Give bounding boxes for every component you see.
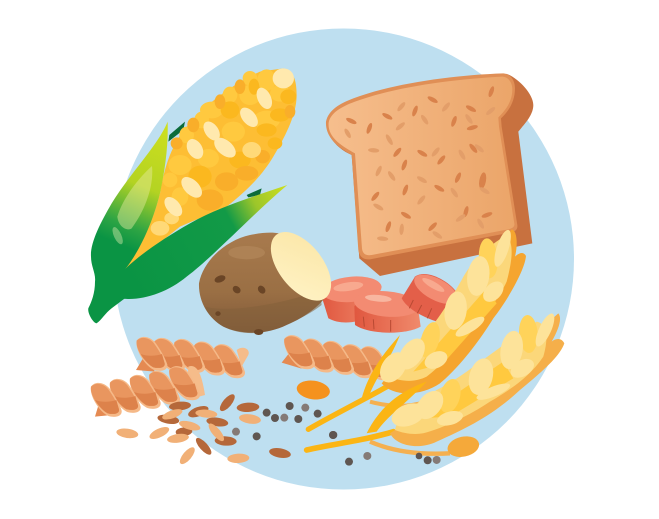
icon: corn [88,68,297,323]
dark husk behind [168,122,262,197]
cob [122,68,297,273]
right husk [120,185,287,299]
left husk [88,122,168,323]
icon: grains [116,392,292,466]
icon: pasta spiral center [282,335,392,380]
slice left [321,274,383,323]
slice right [402,269,462,323]
icon: peppercorns and orange seed [232,378,337,440]
icon: sausage slices [321,269,462,333]
potato eyes [214,274,267,335]
background circle [113,28,574,490]
icon: peppercorns lower right [329,431,441,466]
icon: pasta spiral lower left [91,366,205,417]
kernels [151,68,296,236]
icon: bread slice [326,73,533,276]
icon: pasta spiral upper left [136,337,249,378]
slice middle [353,289,421,333]
icon: wheat ear upper [308,228,526,429]
icon: potato [199,221,343,335]
bread seeds [345,86,495,233]
kernel highlights [161,68,294,220]
icon: wheat ear lower [307,311,564,460]
husk shine [117,166,152,229]
